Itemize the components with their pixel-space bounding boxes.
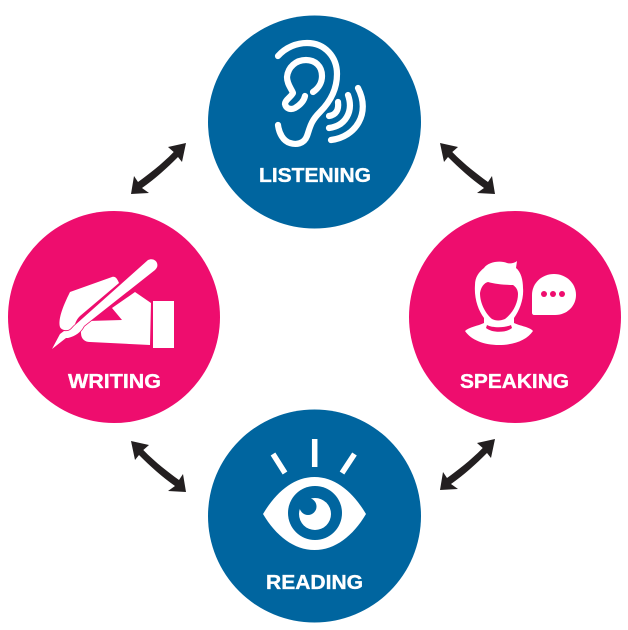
panel: writing — [8, 211, 220, 423]
arrow: listening to writing — [131, 143, 186, 194]
panel: speaking — [409, 211, 621, 423]
icon: hand writing with pen — [52, 259, 174, 349]
panel: reading — [208, 410, 421, 622]
arrow: speaking to reading — [440, 439, 495, 490]
panel: listening — [208, 16, 421, 228]
label: listening: LISTENING — [259, 165, 371, 187]
icon: ear with sound waves — [278, 43, 363, 144]
label: reading: READING — [266, 572, 363, 594]
label: speaking: SPEAKING — [460, 371, 569, 393]
arrow: writing to reading — [131, 441, 186, 492]
arrow: listening to speaking — [440, 143, 495, 194]
icon: person speaking with speech bubble — [465, 261, 576, 345]
icon: eye with rays — [263, 439, 366, 550]
label: writing: WRITING — [68, 371, 161, 393]
